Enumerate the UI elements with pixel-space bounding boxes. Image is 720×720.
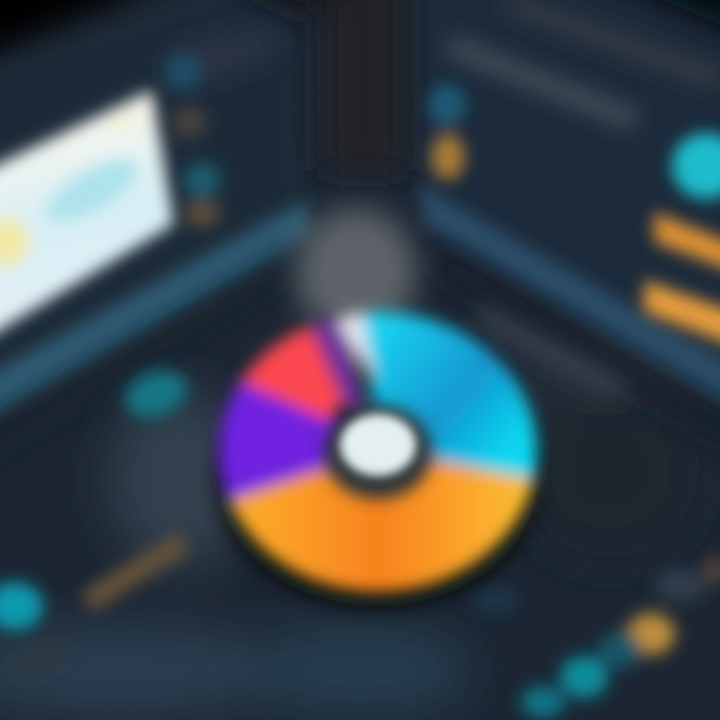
bottom left teal chip bbox=[0, 582, 43, 630]
bottom left bar bbox=[82, 532, 188, 612]
grey blob above chart bbox=[296, 208, 416, 336]
bottom right chips bbox=[471, 556, 720, 718]
panel: left dashboard bbox=[0, 0, 305, 400]
white data card bbox=[0, 90, 174, 348]
segment: dark purple bbox=[310, 305, 372, 440]
right panel sidebar icons bbox=[428, 84, 466, 180]
segment: red bbox=[232, 328, 345, 422]
left panel header bar bbox=[170, 30, 275, 85]
segment: orange bbox=[217, 439, 546, 606]
left panel sidebar icons bbox=[165, 54, 220, 227]
segment: white bbox=[338, 305, 374, 380]
donut chart shadow bbox=[220, 358, 536, 606]
panel: right dashboard bbox=[420, 0, 720, 385]
shadow under right band bbox=[430, 245, 720, 465]
right panel lower edge band bbox=[418, 184, 720, 425]
bottom left muted chip bbox=[8, 638, 72, 682]
floor header bar bbox=[475, 305, 625, 400]
left panel lower edge band bbox=[0, 200, 315, 436]
right panel header bars bbox=[448, 0, 720, 130]
segment: cyan bbox=[358, 290, 560, 484]
donut chart bbox=[207, 300, 550, 606]
right panel orange bars bbox=[644, 212, 720, 348]
chart hub bbox=[340, 414, 416, 476]
chart hub ring bbox=[324, 405, 432, 499]
teal chip left bbox=[118, 362, 194, 426]
right panel teal circle bbox=[672, 133, 720, 199]
top dark corners and centre column bbox=[0, 0, 720, 170]
shadow under left band bbox=[0, 250, 300, 470]
segment: purple bbox=[207, 370, 350, 514]
floor light patches bbox=[0, 340, 700, 715]
